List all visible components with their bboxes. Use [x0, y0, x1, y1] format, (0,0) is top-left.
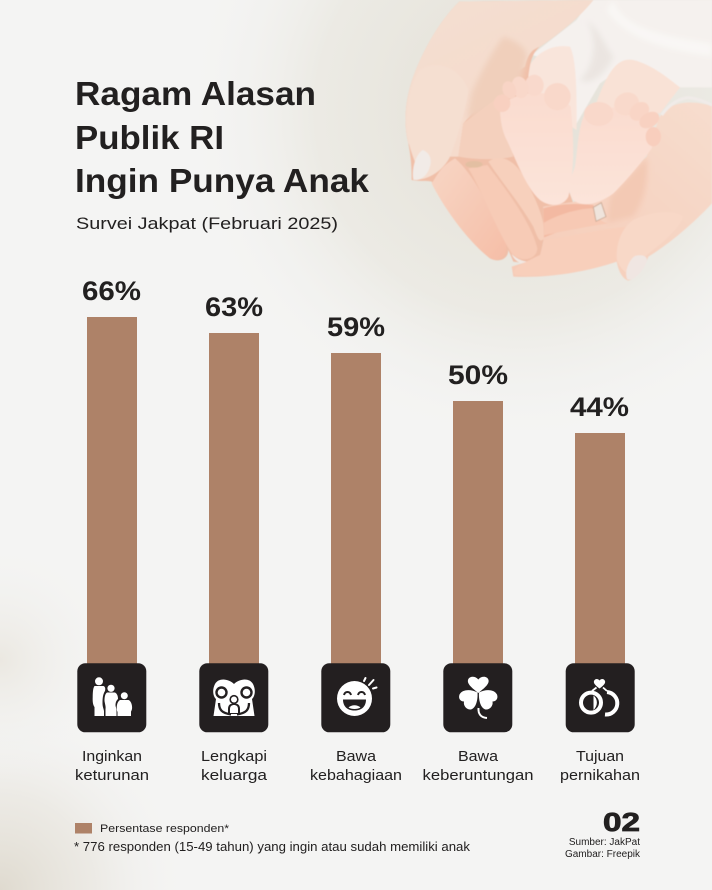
icon: wedding rings — [566, 663, 635, 732]
baby clothes — [532, 0, 712, 123]
right palm shading — [607, 157, 648, 223]
left fingernail — [512, 254, 538, 266]
source credits — [565, 837, 641, 860]
category labels: pernikahan — [560, 767, 640, 784]
bar: Lengkapi keluarga 63%: 63% — [205, 292, 263, 322]
right thumb nail — [626, 255, 647, 280]
category labels: Bawa — [458, 748, 499, 765]
category labels: kebahagiaan — [310, 767, 402, 784]
right hand fingers — [543, 204, 597, 237]
category labels: Bawa — [336, 748, 377, 765]
subtitle: Survei Jakpat (Februari 2025) — [76, 214, 338, 233]
bar chart — [82, 276, 629, 667]
category labels: Lengkapi — [201, 748, 267, 765]
bar: Inginkan keturunan 66%: 66% — [82, 276, 141, 306]
category labels: Tujuan — [576, 748, 624, 765]
baby legs — [525, 46, 577, 130]
title: Ragam Alasan — [75, 75, 316, 112]
left palm shading — [467, 37, 527, 120]
left palm — [458, 93, 513, 159]
bar: Bawa kebahagiaan 59%: 59% — [327, 312, 385, 342]
bar: Bawa keberuntungan 50%: 50% — [448, 360, 508, 390]
bracelet — [662, 98, 712, 115]
bar: Tujuan pernikahan 44% — [570, 392, 629, 667]
category labels: keturunan — [75, 767, 149, 784]
left thumb — [406, 65, 468, 180]
bar: Tujuan pernikahan 44%: 44% — [570, 392, 629, 422]
wedding ring left — [465, 161, 483, 168]
right hand — [512, 103, 712, 281]
category labels: keluarga — [201, 767, 268, 784]
source credits: Sumber: JakPat — [569, 837, 640, 848]
bar: Bawa keberuntungan 50% — [448, 360, 508, 667]
category labels: keberuntungan — [422, 767, 534, 784]
page number: 02 — [603, 807, 640, 837]
icon: family — [77, 663, 146, 732]
wedding ring right — [593, 203, 606, 221]
right thumb — [617, 212, 683, 277]
title: Publik RI — [75, 119, 224, 156]
left hand silhouette — [406, 0, 593, 265]
bar: Lengkapi keluarga 63% — [205, 292, 263, 667]
icon: clover — [443, 663, 512, 732]
bar: Bawa kebahagiaan 59% — [327, 312, 385, 667]
right foot — [570, 88, 662, 204]
icon: laughing face — [321, 663, 390, 732]
title: Ingin Punya Anak — [75, 162, 370, 199]
bar: Inginkan keturunan 66% — [82, 276, 141, 667]
footnote: * 776 responden (15-49 tahun) yang ingin atau sudah memiliki anak — [74, 840, 471, 854]
icon: family in heart — [199, 663, 268, 732]
left thumb nail — [413, 150, 431, 180]
left hand back — [406, 0, 593, 157]
left foot — [494, 75, 573, 205]
title — [75, 75, 370, 199]
source credits: Gambar: Freepik — [565, 849, 641, 860]
legend: Persentase responden* — [100, 823, 230, 835]
photo: hands cradling baby feet — [406, 0, 712, 281]
category labels: Inginkan — [82, 748, 142, 765]
left hand fingers — [432, 158, 506, 260]
category labels — [75, 748, 640, 784]
